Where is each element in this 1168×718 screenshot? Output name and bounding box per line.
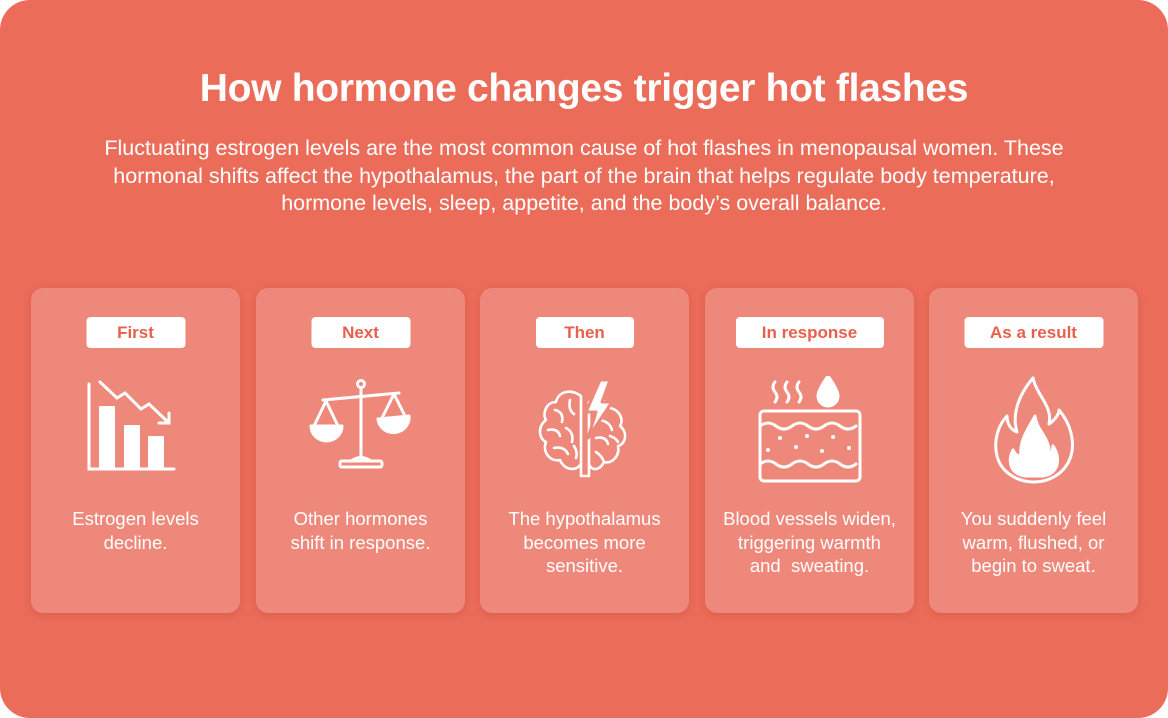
caption: Other hormones — [294, 508, 427, 529]
card: in response — [705, 288, 914, 613]
label: As a result: As a result — [990, 323, 1077, 342]
caption: begin to sweat. — [971, 555, 1096, 576]
icon: blood vessel with heat and drop — [758, 376, 862, 482]
label: First: First — [117, 323, 154, 342]
caption — [291, 508, 430, 553]
caption — [72, 508, 199, 552]
label: Next: Next — [342, 323, 379, 342]
intro text: hormonal shifts affect the hypothalamus, the part of the brain that helps regulate body temperature, — [113, 164, 1055, 188]
caption: You suddenly feel — [961, 508, 1106, 529]
caption — [508, 508, 661, 576]
icon: declining bar chart — [88, 380, 176, 470]
label: Then: Then — [564, 323, 605, 342]
caption: shift in response. — [291, 532, 430, 552]
card: first — [31, 288, 240, 613]
label: In response — [736, 317, 884, 348]
icon: flame — [994, 376, 1074, 484]
caption: Blood vessels widen, — [723, 508, 896, 529]
label: As a result — [964, 317, 1103, 348]
caption: decline. — [104, 532, 167, 552]
caption: warm, flushed, or — [963, 532, 1104, 552]
caption: sensitive. — [546, 555, 623, 576]
intro text: Fluctuating estrogen levels are the most common cause of hot flashes in menopausal women. These — [104, 136, 1064, 160]
caption — [961, 508, 1106, 576]
card: next — [256, 288, 465, 613]
intro text — [104, 136, 1064, 215]
title: How hormone changes trigger hot flashes — [200, 67, 968, 110]
icon: brain with lightning — [538, 382, 626, 478]
caption: triggering warmth — [738, 532, 881, 552]
caption: The hypothalamus — [508, 508, 661, 529]
caption — [723, 508, 896, 576]
icon: balance scale — [310, 379, 411, 468]
label: In response: In response — [762, 323, 857, 342]
label: First — [86, 317, 185, 348]
label: Next — [311, 317, 410, 348]
caption: and sweating. — [750, 555, 869, 576]
label: Then — [536, 317, 634, 348]
card: then — [480, 288, 689, 613]
intro text: hormone levels, sleep, appetite, and the body’s overall balance. — [281, 191, 887, 215]
caption: becomes more — [523, 532, 646, 552]
card: as a result — [929, 288, 1138, 613]
caption: Estrogen levels — [72, 508, 199, 529]
